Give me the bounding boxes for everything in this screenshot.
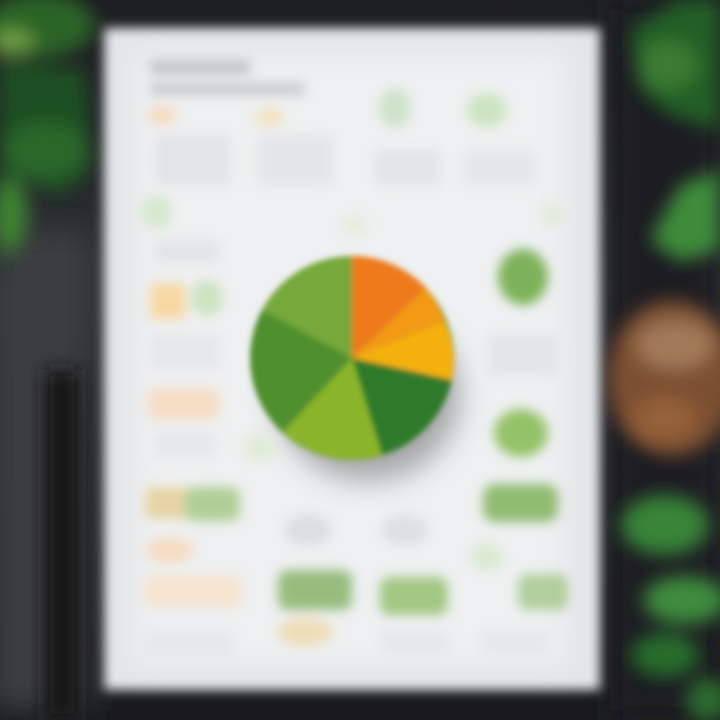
wedge: mid green bbox=[250, 310, 352, 432]
top left text columns bbox=[148, 105, 333, 185]
walnut bbox=[608, 300, 720, 456]
pie shadow bbox=[276, 309, 460, 481]
top right icons and text bbox=[375, 88, 535, 185]
right column icons bbox=[483, 249, 558, 522]
bottom centre text bbox=[244, 434, 503, 571]
wedge: light green bbox=[283, 358, 382, 459]
wedge: yellow bbox=[352, 322, 453, 380]
left leaves bbox=[0, 0, 95, 280]
heading bbox=[150, 60, 305, 96]
bottom green bars bbox=[277, 570, 568, 655]
left column badges bbox=[148, 280, 223, 457]
pie chart bbox=[250, 256, 454, 460]
wedge: dark green bbox=[352, 358, 452, 455]
paper sheet bbox=[104, 28, 600, 690]
right leaves top bbox=[630, 0, 720, 262]
wedge: upper green bbox=[262, 256, 352, 358]
wedge: orange bbox=[352, 256, 426, 358]
left column icon small bbox=[142, 195, 565, 262]
wedge: orange amber bbox=[352, 288, 445, 358]
right leaves bottom bbox=[621, 495, 720, 720]
left column lower bars bbox=[145, 487, 242, 660]
